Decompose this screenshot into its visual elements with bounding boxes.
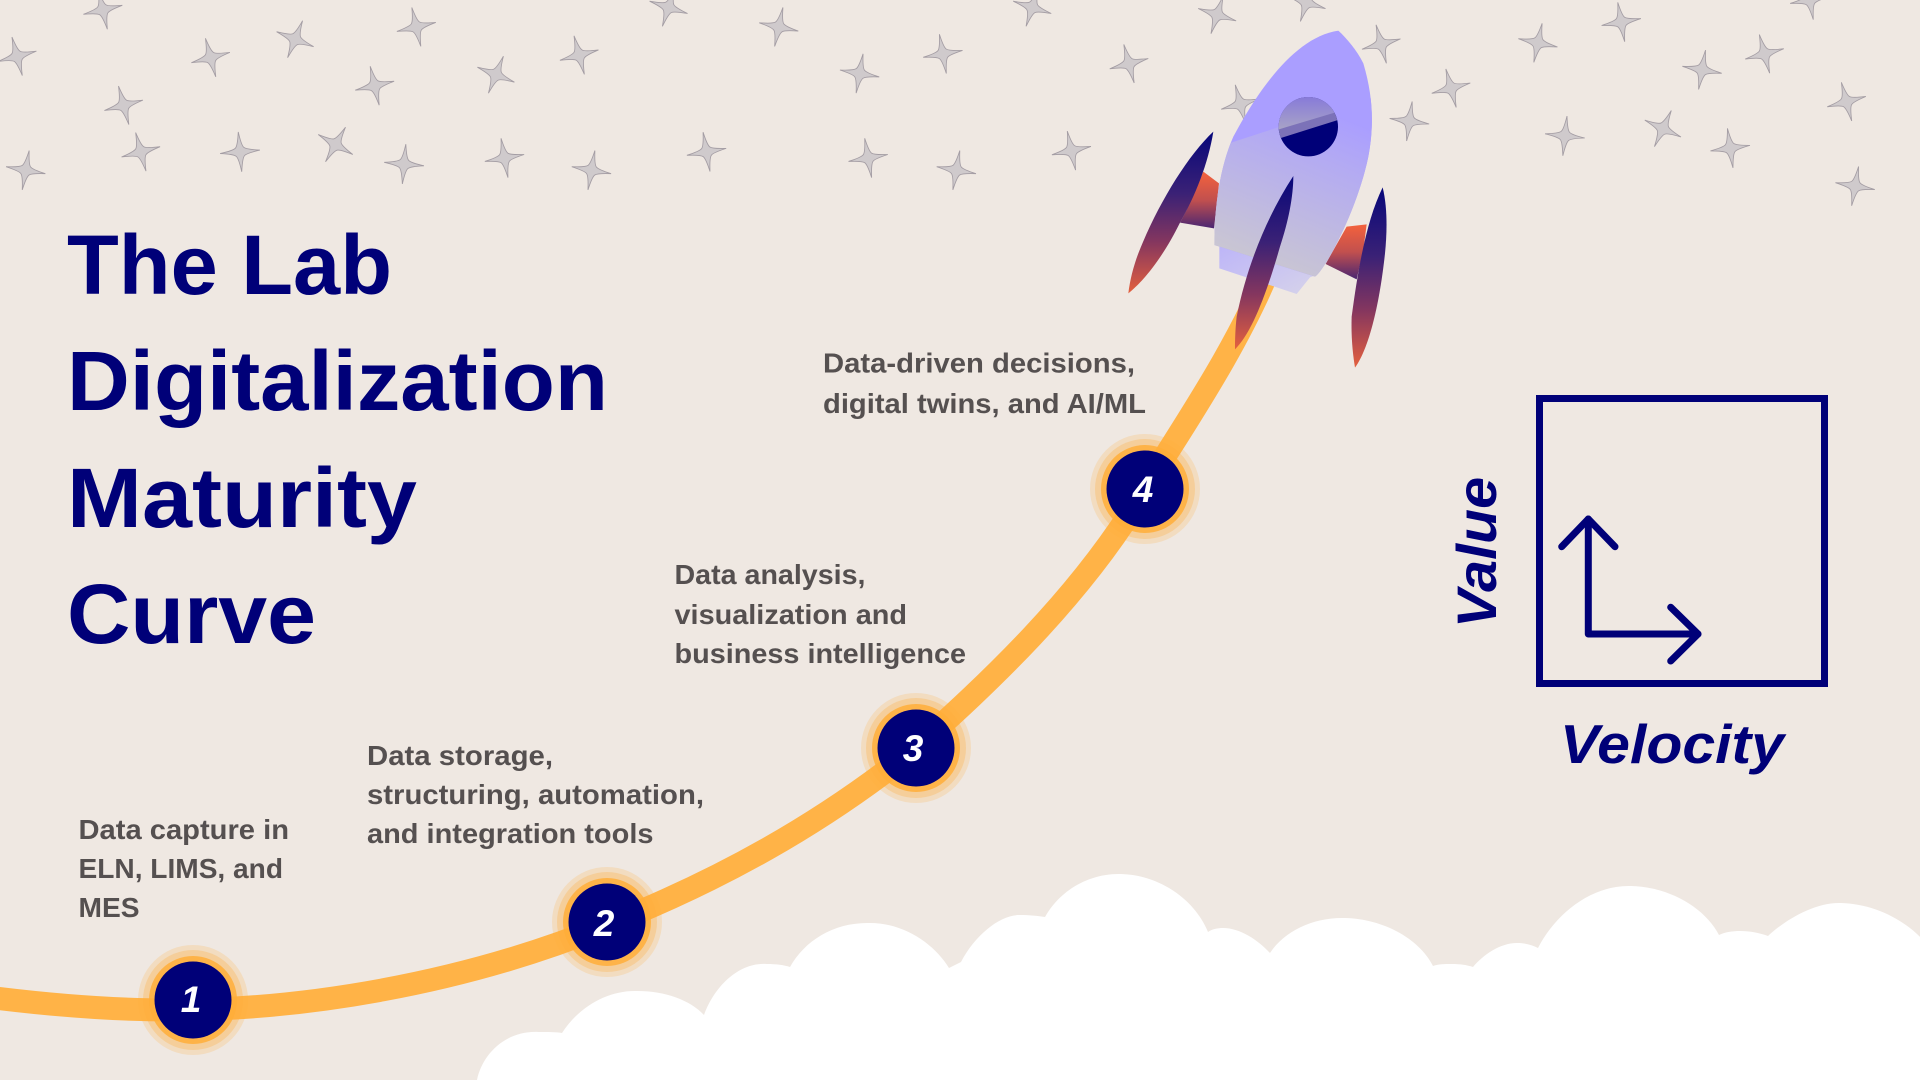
rocket connector left	[1180, 172, 1219, 228]
step 1 description: Data capture in	[78, 814, 289, 845]
step 3 description: visualization and	[674, 599, 907, 630]
rocket fin right	[1352, 187, 1387, 368]
clouds	[477, 874, 1920, 1080]
rocket fin left	[1128, 132, 1213, 293]
step node 2: 2	[593, 903, 615, 944]
step 2 description: and integration tools	[367, 818, 654, 849]
step node 1: 1	[181, 979, 201, 1020]
title: Maturity	[67, 451, 417, 545]
maturity curve	[0, 262, 1272, 1010]
title: Digitalization	[67, 334, 608, 428]
step node 4	[1090, 434, 1200, 544]
rocket connector right	[1326, 224, 1367, 279]
step 3 description: Data analysis,	[674, 559, 866, 590]
axis label: velocity: Velocity	[1560, 713, 1787, 775]
rocket window	[1278, 97, 1338, 156]
step 1 description: ELN, LIMS, and	[78, 853, 283, 884]
axis label: value: Value	[1445, 477, 1508, 628]
rocket nozzle	[1219, 246, 1315, 294]
step 2 description: Data storage,	[367, 740, 553, 771]
axis icon: value vs velocity box	[1540, 398, 1824, 684]
rocket body	[1214, 30, 1372, 276]
step node 3	[861, 693, 971, 803]
title: The Lab	[67, 218, 392, 312]
step node 1	[138, 945, 248, 1055]
step node 2	[552, 867, 662, 977]
step 4 description: digital twins, and AI/ML	[823, 388, 1146, 419]
step 2 description: structuring, automation,	[367, 779, 704, 810]
step node 3: 3	[903, 728, 924, 769]
rocket fin centre	[1235, 176, 1293, 349]
step 4 description: Data-driven decisions,	[823, 348, 1135, 378]
step 3 description: business intelligence	[674, 638, 966, 669]
starry background	[0, 0, 1878, 209]
rocket	[1128, 27, 1387, 368]
step 1 description: MES	[78, 892, 140, 923]
step node 4: 4	[1132, 469, 1153, 510]
title: Curve	[67, 567, 316, 661]
